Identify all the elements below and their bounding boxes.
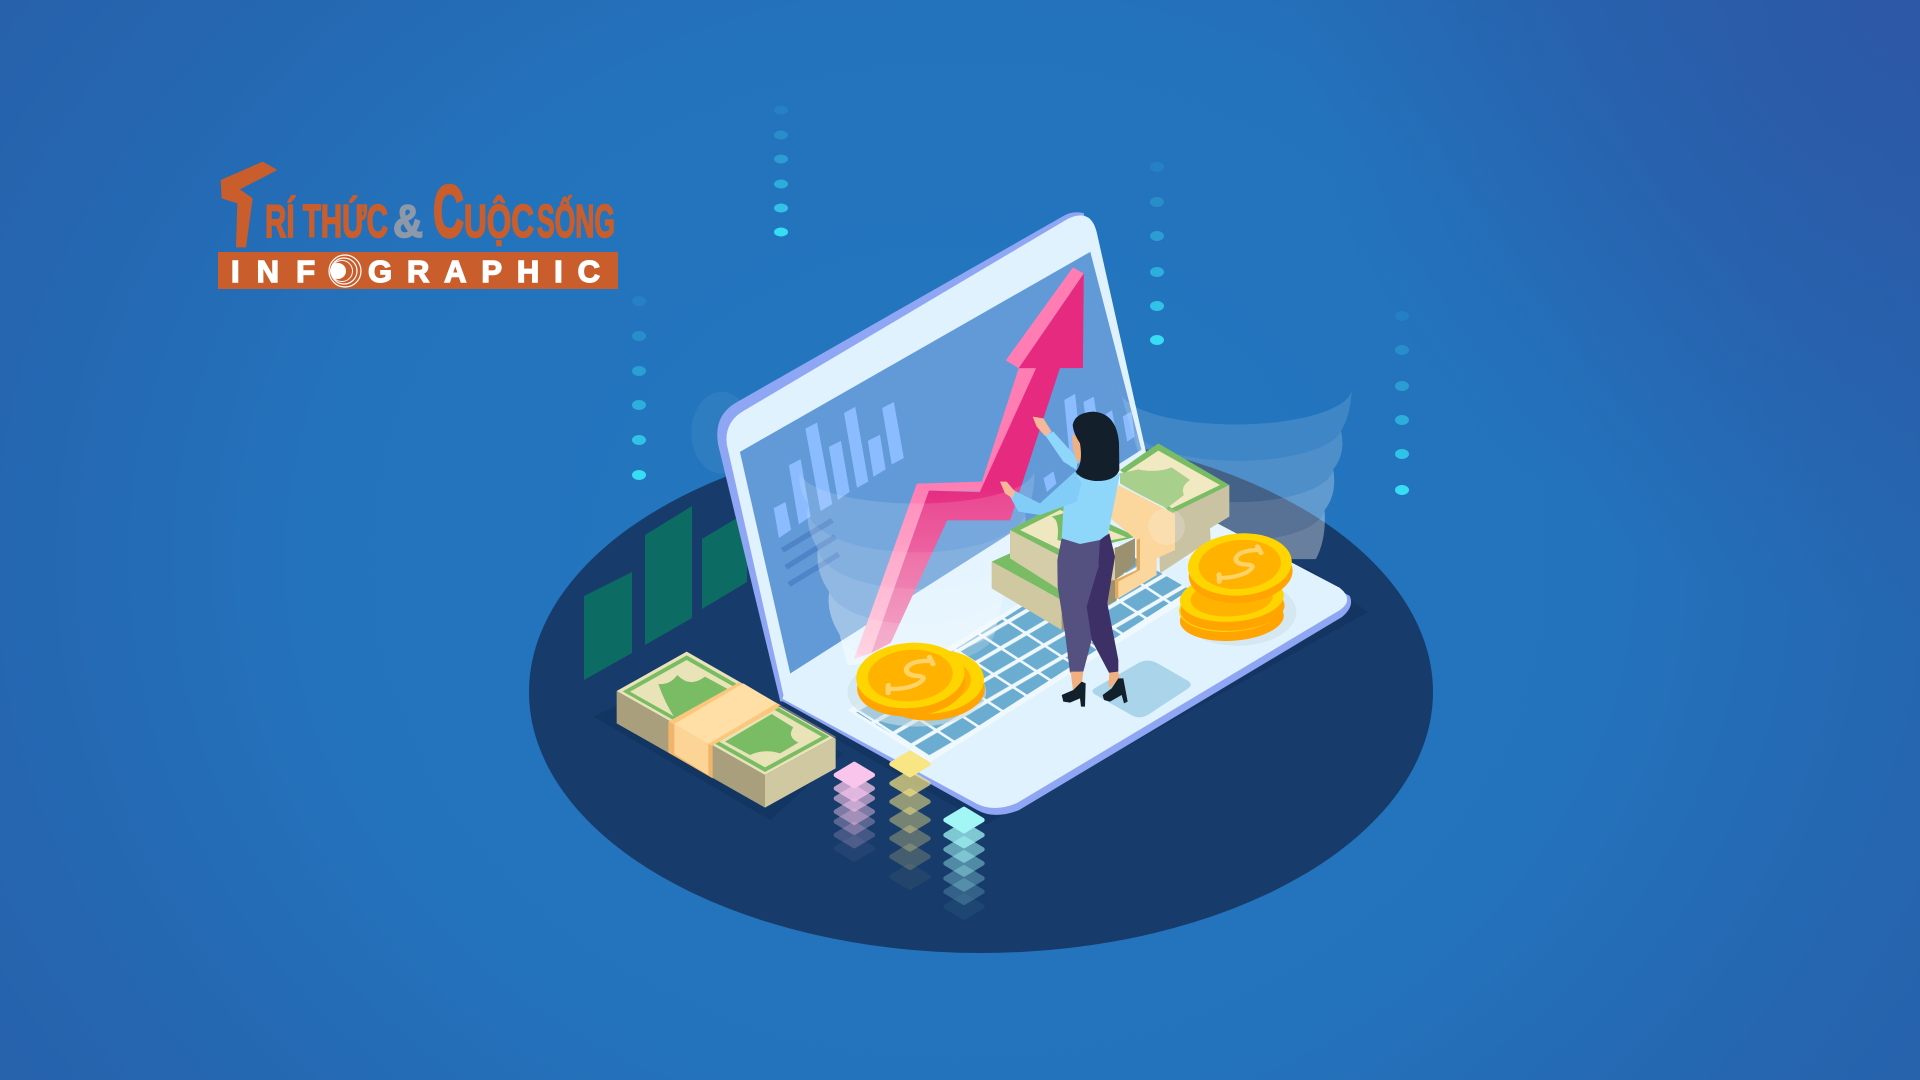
back coin <box>877 646 987 725</box>
laptop base edge <box>780 453 1351 815</box>
laptop shadow <box>778 567 1368 824</box>
logo wordmark: C <box>433 170 464 253</box>
pink diamond stack <box>836 764 873 859</box>
left translucent coin swirl <box>799 467 1034 665</box>
front coin <box>853 639 968 721</box>
yellow diamond stack <box>892 753 928 888</box>
front coin stack <box>847 639 987 727</box>
bottom coin <box>1177 581 1285 644</box>
desk money stacks <box>992 443 1229 630</box>
green background bars <box>584 506 747 680</box>
arrow edge <box>854 267 1084 659</box>
screen bar chart right <box>1043 394 1135 492</box>
logo banner <box>218 252 618 289</box>
logo wordmark: RÍ THỨC <box>265 195 388 247</box>
hands <box>1000 417 1052 498</box>
laptop screen <box>740 252 1141 673</box>
front leg <box>1057 538 1100 673</box>
keyboard <box>847 543 1197 762</box>
laptop lid back edge <box>717 212 1086 702</box>
logo wordmark: & <box>393 195 423 247</box>
face <box>1072 433 1083 463</box>
logo circle icon <box>329 255 361 287</box>
faint swirl behind lid <box>691 392 752 473</box>
logo <box>218 162 618 289</box>
hair <box>1073 412 1119 481</box>
logo banner text <box>231 254 600 289</box>
ankles <box>1071 672 1119 693</box>
dark platform ellipse <box>529 431 1433 953</box>
dots column 3 <box>632 296 646 480</box>
logo letter T mark <box>221 162 277 247</box>
woman figure <box>1000 412 1128 707</box>
lower arm <box>1010 472 1082 515</box>
shoes <box>1062 678 1128 707</box>
logo wordmark: SỐNG <box>537 195 615 247</box>
arrow face <box>871 273 1084 653</box>
rear money stack <box>1120 443 1229 573</box>
laptop scene <box>691 212 1368 824</box>
dots column 2 <box>1150 162 1164 345</box>
diamond stacks <box>836 753 982 918</box>
money band <box>1108 485 1185 598</box>
logo wordmark: UỘC <box>464 195 534 247</box>
logo banner text: INF <box>231 254 315 289</box>
middle coin <box>1178 571 1286 634</box>
dots column 4 <box>1395 311 1409 495</box>
screen bar chart left <box>774 402 904 538</box>
laptop lid face <box>726 215 1147 700</box>
dots column 1 <box>774 106 788 236</box>
right translucent coin swirl <box>1119 389 1352 559</box>
cyan diamond stack <box>946 809 982 918</box>
logo banner text: GRAPHIC <box>368 254 600 289</box>
arrow <box>854 267 1084 659</box>
upper raised arm <box>1045 432 1077 470</box>
right coin stack <box>1177 529 1296 646</box>
lower money stack <box>992 553 1117 630</box>
coin stacks <box>847 529 1296 727</box>
laptop base top <box>782 453 1347 808</box>
floor money stack <box>593 652 843 820</box>
torso <box>1062 473 1120 544</box>
back leg <box>1086 533 1118 673</box>
logo wordmark <box>265 170 615 253</box>
top coin <box>1185 529 1295 607</box>
trackpad <box>1092 661 1191 717</box>
screen text lines <box>782 520 839 584</box>
middle money stack <box>1010 502 1137 590</box>
